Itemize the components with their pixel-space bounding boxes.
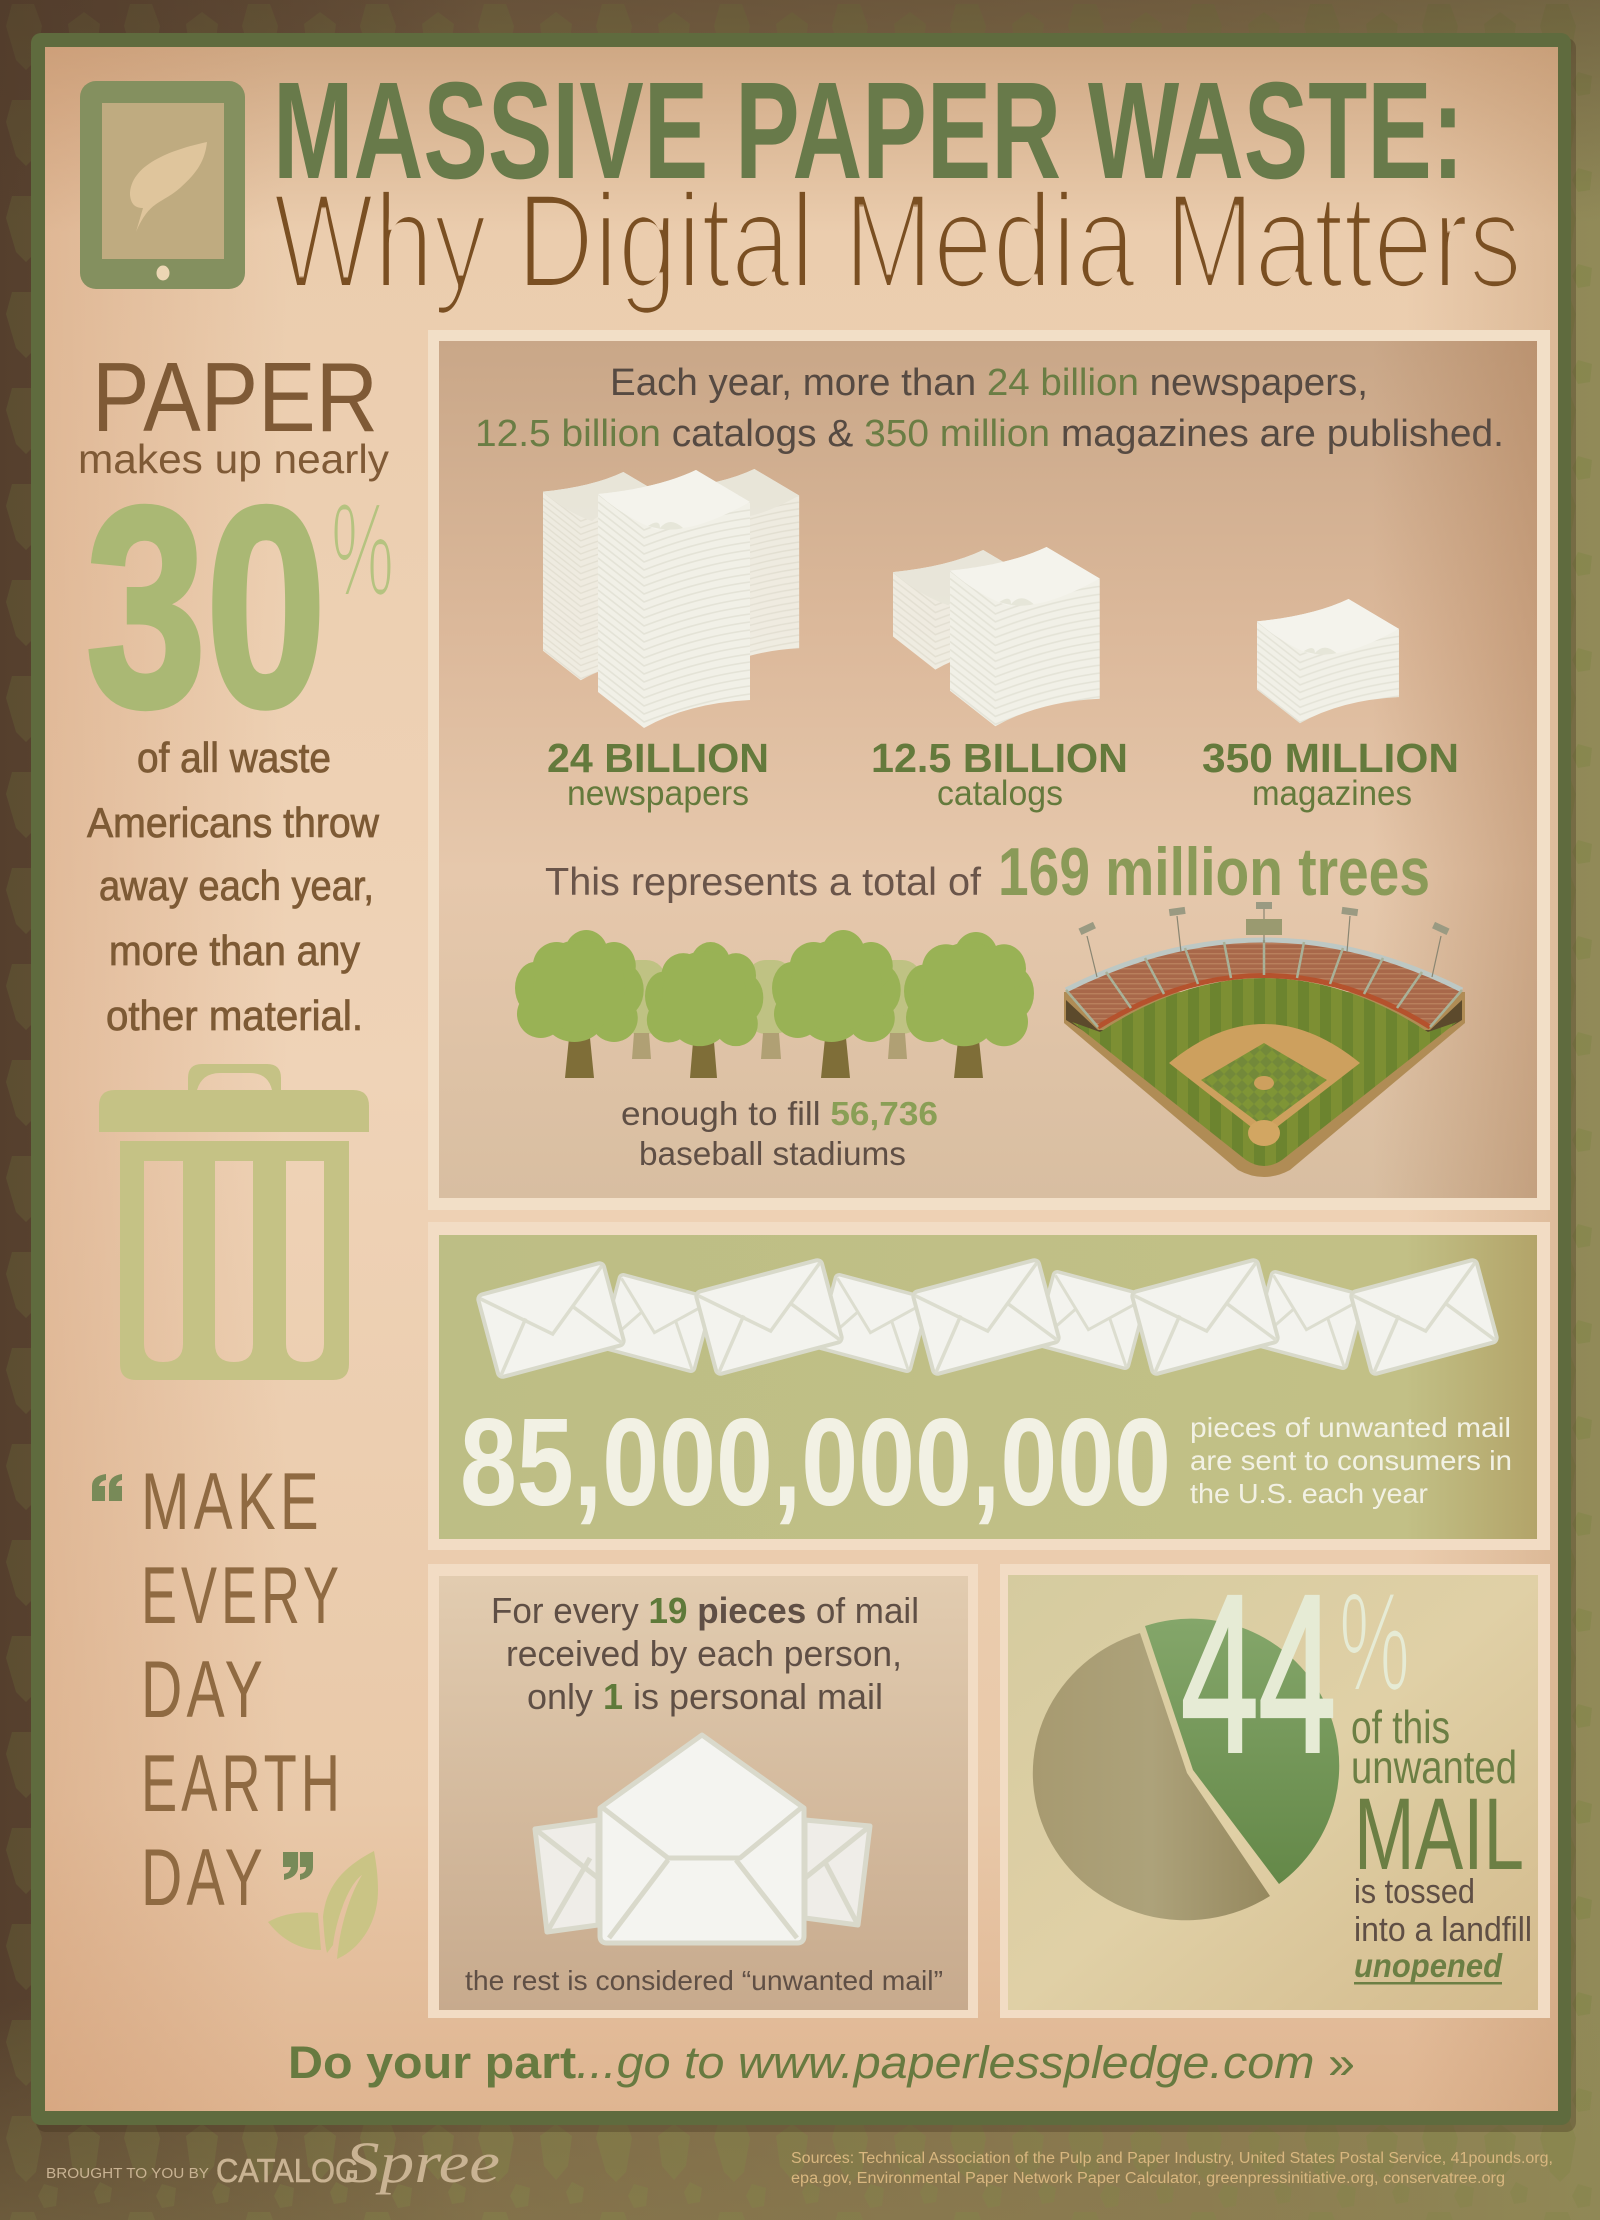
text: of all waste: Americans throw — [87, 799, 380, 846]
label: 12.5 billion catalogs — [871, 735, 1128, 813]
intro text — [475, 362, 1504, 455]
label: 24 billion newspapers: newspapers — [567, 774, 749, 813]
number: 85 billion: 85,000,000,000 — [460, 1394, 1171, 1532]
footer: sources: Sources: Technical Association of the Pulp and Paper Industry, United States Postal Service, 41pounds.org, — [791, 2150, 1553, 2167]
footer: brought to you by: CATALOG — [216, 2152, 359, 2189]
footer: brought to you by: BROUGHT TO YOU BY — [46, 2165, 209, 2182]
panel: unopened mail — [1000, 1549, 1550, 2018]
text: of all waste: more than any — [109, 927, 360, 974]
footer: sources — [791, 2150, 1553, 2187]
number: 44 percent: % — [1339, 1563, 1410, 1720]
text: makes up nearly: makes up nearly — [78, 436, 390, 482]
icon: leaves — [268, 1851, 378, 1959]
panel: personal mail ratio — [428, 1564, 978, 2018]
icon: envelope row — [477, 1259, 1498, 1378]
text: of this unwanted mail: MAIL — [1354, 1777, 1524, 1891]
quote: make every day earth day — [92, 1457, 378, 1959]
text: of all waste: other material. — [106, 992, 363, 1039]
icon: magazines stack — [1257, 599, 1399, 723]
text: tossed into a landfill: is tossed — [1354, 1873, 1475, 1911]
icon: open envelope — [535, 1735, 870, 1943]
text: total trees: This represents a total of — [545, 861, 981, 904]
quote words: DAY — [141, 1645, 267, 1735]
text: for every 19 pieces: received by each person, — [506, 1633, 902, 1674]
text: total trees — [545, 834, 1430, 910]
quote words: EVERY — [141, 1551, 343, 1641]
text: pieces of unwanted mail — [1190, 1412, 1512, 1509]
text: pieces of unwanted mail: are sent to consumers in — [1190, 1445, 1512, 1476]
text: for every 19 pieces: For every 19 pieces of mail — [491, 1590, 919, 1631]
title — [273, 54, 1522, 316]
text: for every 19 pieces: only 1 is personal mail — [527, 1676, 883, 1717]
label: 12.5 billion catalogs: catalogs — [937, 774, 1063, 813]
icon: tablet with leaf — [80, 81, 245, 289]
text: of this unwanted mail — [1351, 1701, 1524, 1891]
footer: sources: epa.gov, Environmental Paper Network Paper Calculator, greenpressinitiative.org, conservatree.org — [791, 2170, 1505, 2187]
label: 350 million magazines — [1202, 735, 1459, 813]
icon: trash can — [99, 1064, 369, 1380]
number: 44 percent: 44 — [1181, 1549, 1336, 1799]
number: 30: 30 — [86, 449, 326, 766]
quote words: EARTH — [141, 1739, 344, 1829]
text: enough to fill stadiums: baseball stadiums — [639, 1135, 906, 1172]
label: 350 million magazines: 350 MILLION — [1202, 735, 1459, 781]
panel: publications and trees — [428, 330, 1550, 1210]
text: of all waste: away each year, — [99, 862, 374, 909]
icon: catalogs stacks — [893, 547, 1100, 726]
closing quote mark — [283, 1852, 313, 1880]
footer: brought to you by: Spree — [345, 2130, 500, 2195]
label: 24 billion newspapers: 24 BILLION — [547, 735, 769, 781]
intro text: 12.5 billion catalogs & 350 million magazines are published. — [475, 413, 1504, 455]
text: of all waste: of all waste — [137, 734, 331, 781]
icon: baseball stadium — [1064, 902, 1465, 1177]
text: of this unwanted mail: unwanted — [1351, 1741, 1517, 1793]
intro text: Each year, more than 24 billion newspapers, — [610, 362, 1368, 404]
call to action: Do your part ...go to www.paperlesspledge.com » — [288, 2037, 1355, 2088]
footer: brought to you by — [46, 2130, 500, 2195]
label: 350 million magazines: magazines — [1252, 774, 1412, 813]
icon: newspapers stacks — [543, 469, 799, 728]
text: unopened: unopened — [1354, 1947, 1503, 1984]
percent sign: % — [331, 476, 394, 623]
text: of all waste — [87, 734, 380, 1039]
text: total trees: 169 million trees — [998, 834, 1430, 910]
text: enough to fill stadiums — [621, 1095, 938, 1172]
icon: trees — [515, 930, 1034, 1078]
text: for every 19 pieces — [491, 1590, 919, 1717]
left column: paper statistic — [78, 342, 394, 1039]
text: pieces of unwanted mail: the U.S. each year — [1190, 1478, 1428, 1509]
text: tossed into a landfill: into a landfill — [1354, 1911, 1532, 1949]
quote words — [141, 1457, 344, 1923]
text: of this unwanted mail: of this — [1351, 1701, 1450, 1753]
opening quote mark — [92, 1474, 122, 1501]
text: tossed into a landfill — [1354, 1873, 1532, 1949]
label: 24 billion newspapers — [547, 735, 769, 813]
label: 12.5 billion catalogs: 12.5 BILLION — [871, 735, 1128, 781]
quote words: MAKE — [141, 1457, 323, 1547]
pie chart: 44 percent — [1033, 1619, 1339, 1920]
text: the rest is considered unwanted mail: the rest is considered “unwanted mail” — [465, 1965, 943, 1996]
quote words: DAY — [141, 1833, 267, 1923]
heading: paper: PAPER — [92, 342, 378, 452]
text: pieces of unwanted mail: pieces of unwanted mail — [1190, 1412, 1511, 1443]
text: enough to fill stadiums: enough to fill 56,736 — [621, 1095, 938, 1132]
panel: unwanted mail count — [428, 1222, 1550, 1550]
